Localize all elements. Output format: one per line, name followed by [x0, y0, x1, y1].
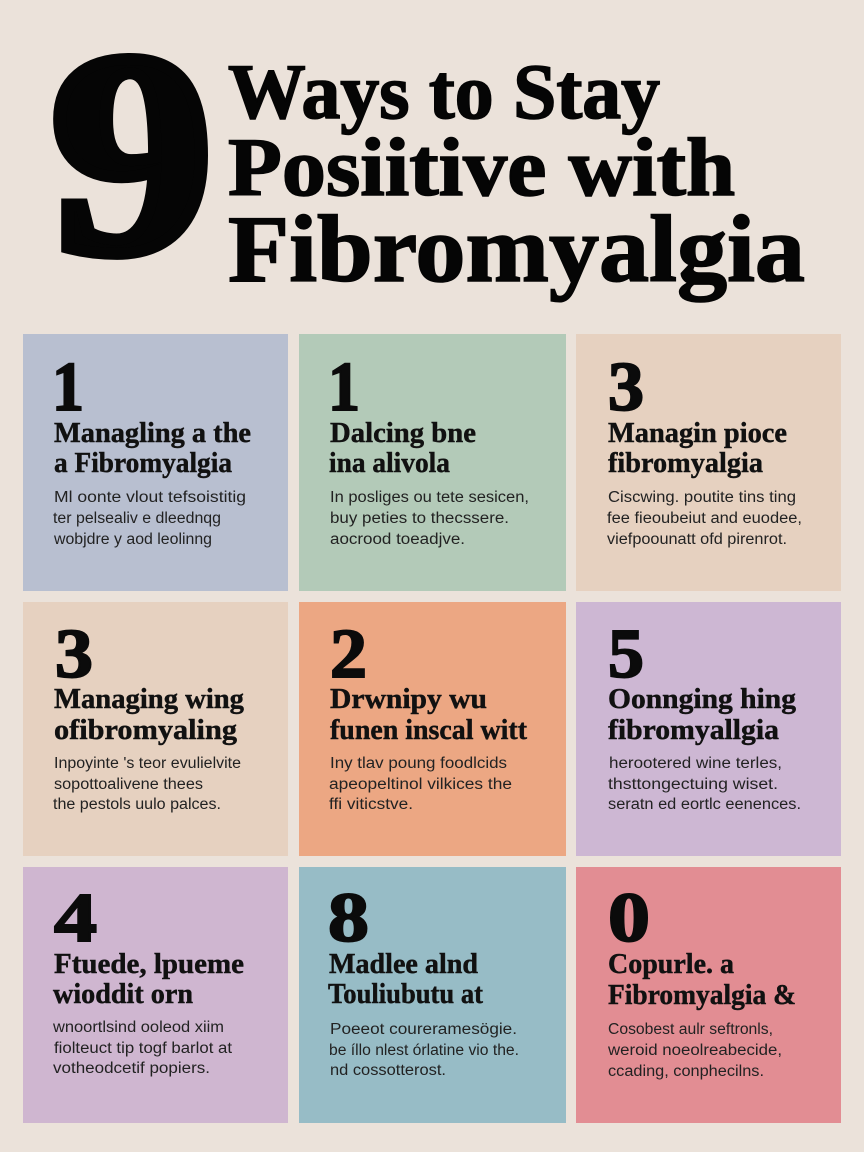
body text: buy peties to thecssere.: [330, 510, 509, 527]
body text: nd cossotterost.: [330, 1062, 446, 1079]
heading: Drwnipy wu: [330, 684, 487, 715]
panel: card 8: [299, 867, 566, 1123]
panel: card 9: [576, 867, 841, 1123]
number 4: 4: [54, 880, 97, 957]
body text: ccading, conphecilns.: [608, 1063, 764, 1080]
heading: [54, 684, 244, 746]
body text: [53, 755, 241, 813]
body text: [52, 1019, 233, 1077]
heading: Ftuede, lpueme: [54, 949, 244, 980]
body text: the pestols uulo palces.: [53, 796, 221, 813]
body text: [607, 1021, 782, 1080]
body text: thsttongectuing wiset.: [608, 776, 778, 793]
body text: wobjdre y aod leolinng: [53, 531, 212, 548]
panel: card 1: [23, 334, 288, 591]
body text: [329, 1021, 519, 1079]
title: Posiitive with: [228, 121, 735, 213]
body text: [329, 755, 512, 813]
body text: sopottoalivene thees: [54, 776, 203, 793]
body text: herootered wine terles,: [609, 755, 782, 772]
number 3: 3: [608, 349, 644, 426]
body text: Ml oonte vlout tefsoistitig: [54, 489, 246, 506]
body text: [608, 755, 801, 813]
panel: card 6: [576, 602, 841, 856]
body text: wnoortlsind ooleod xiim: [52, 1019, 224, 1036]
body text: [607, 489, 802, 548]
body text: [53, 489, 246, 548]
heading: [54, 418, 251, 479]
panel: card 3: [576, 334, 841, 591]
heading: [330, 684, 528, 746]
heading: Copurle. a: [608, 949, 734, 980]
heading: fibromyalgia: [608, 448, 763, 479]
number 0: 0: [608, 880, 650, 957]
body text: ffi viticstve.: [329, 796, 413, 813]
heading: Managin piοce: [608, 418, 787, 449]
body text: Poeeot coureramesögie.: [330, 1021, 517, 1038]
heading: [53, 949, 244, 1010]
heading: ina alivola: [329, 448, 450, 479]
big number nine: 9: [51, 0, 213, 314]
body text: Cosobest aulr seftronls,: [608, 1021, 773, 1038]
number 3: 3: [55, 616, 93, 693]
heading: [328, 949, 484, 1010]
panel: card 2: [299, 334, 566, 591]
number 2: 2: [330, 616, 367, 693]
body text: votheodcetif popiers.: [53, 1060, 210, 1077]
number 8: 8: [328, 880, 369, 957]
heading: Managing wing: [54, 684, 244, 715]
body text: fiolteuct tip togf barlot at: [54, 1040, 233, 1057]
body text: Ciscwing. poutite tins ting: [608, 489, 796, 506]
body text: viefpoounatt ofd pirenrot.: [607, 531, 787, 548]
heading: [608, 684, 796, 746]
body text: be íllo nlest órlatine vio the.: [329, 1042, 519, 1059]
panel: card 7: [23, 867, 288, 1123]
heading: Oonnging hing: [608, 684, 796, 715]
heading: Dalcing bne: [330, 418, 476, 449]
body text: aocrood toeadjve.: [330, 531, 465, 548]
body text: In posliges ou tete sesicen,: [330, 489, 529, 506]
heading: [608, 418, 787, 479]
heading: Managling a the: [54, 418, 251, 449]
number 5: 5: [608, 616, 644, 693]
heading: [329, 418, 476, 479]
body text: apeopeltinol vilkices the: [329, 776, 512, 793]
body text: ter pelsealiv e dleednqg: [53, 510, 221, 527]
body text: Inpoyinte 's teor evulielvite: [54, 755, 241, 772]
title: Ways to Stay: [228, 48, 660, 135]
heading: funen inscal witt: [330, 715, 528, 746]
heading: Fibromyalgia &: [608, 980, 796, 1011]
number 1: 1: [328, 349, 360, 426]
number 1: 1: [52, 349, 84, 426]
title: [228, 48, 805, 302]
heading: ofibromyaling: [54, 715, 237, 746]
body text: seratn ed eortlc eenences.: [608, 796, 801, 813]
heading: wioddit orn: [53, 979, 193, 1010]
panel: card 4: [23, 602, 288, 856]
body text: Iny tlav poung foodlcids: [330, 755, 507, 772]
heading: [608, 949, 796, 1011]
heading: Touliubutu at: [328, 979, 484, 1010]
body text: weroid noeolreabecide,: [607, 1042, 782, 1059]
panel: card 5: [299, 602, 566, 856]
title: Fibromyalgia: [228, 196, 805, 302]
body text: fee fieoubeiut and euodee,: [607, 510, 802, 527]
heading: a Fibromyalgia: [54, 448, 232, 479]
body text: [330, 489, 529, 548]
heading: Madlee alnd: [329, 949, 478, 980]
heading: fibromyallgia: [608, 715, 779, 746]
